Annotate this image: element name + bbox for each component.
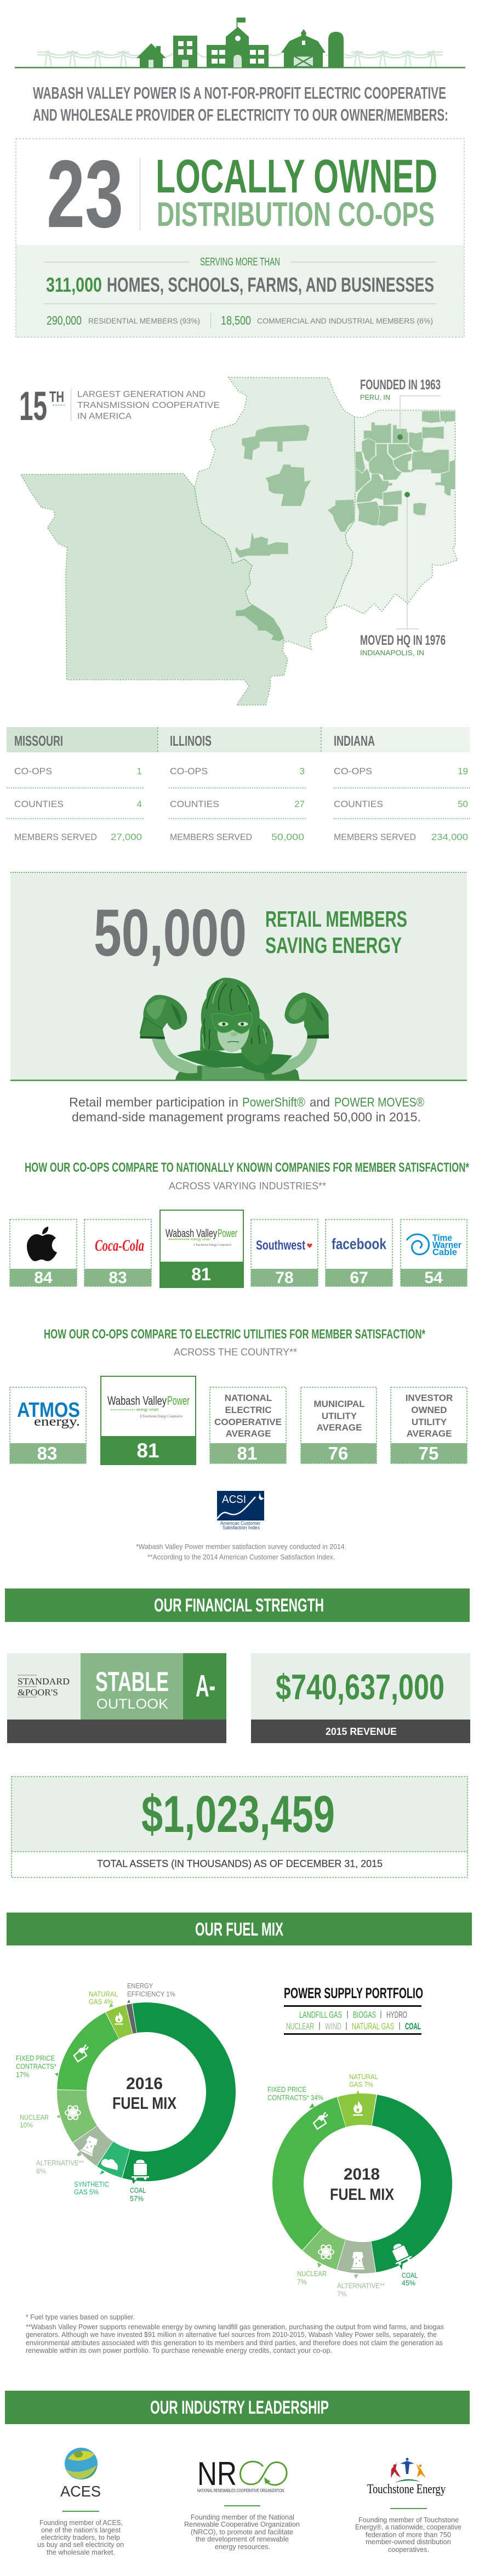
banner: our fuel mix: OUR FUEL MIX: [195, 1919, 283, 1940]
panel base rule: [10, 1080, 467, 1081]
card: Wabash Valley Power 81: energy smart: [136, 1408, 158, 1412]
label: fixed price contracts: FIXED PRICE: [267, 2085, 306, 2093]
Standard & Poor's logo: STANDARD: [18, 1676, 70, 1687]
banner: our industry leadership: OUR INDUSTRY LEADERSHIP: [150, 2397, 329, 2418]
icon: synthetic gas cloud: [101, 2159, 118, 2170]
label: alternative: ALTERNATIVE**: [36, 2159, 84, 2167]
retail members saving energy: [265, 906, 407, 958]
card: Municipal utility average 76: [301, 1387, 377, 1463]
rating A-: A-: [196, 1669, 215, 1704]
callout: 15th largest: 15: [19, 383, 47, 429]
icon: atom: [65, 2104, 81, 2121]
ACSI logo: American Customer: [220, 1520, 260, 1526]
center label: [330, 2165, 394, 2204]
icon: natural gas flame: [115, 2012, 123, 2024]
legend: power supply portfolio: NUCLEAR: [286, 2021, 314, 2032]
NRCO logo: [197, 2455, 287, 2493]
label: synthetic gas: SYNTHETIC: [74, 2180, 109, 2188]
card: National co-op average 81: AVERAGE: [226, 1428, 271, 1439]
programs participation text: Retail member participation in: [69, 1095, 238, 1109]
Touchstone description: member-owned distribution: [366, 2538, 451, 2546]
Standard & Poor's logo: &POOR'S: [18, 1687, 58, 1698]
programs participation text: and: [310, 1095, 330, 1109]
icon: plug: [313, 2112, 328, 2129]
center label: FUEL MIX: [112, 2093, 176, 2113]
panel: S&P rating: [7, 1653, 226, 1743]
power lines: [37, 50, 443, 67]
card: Wabash Valley Power 81: 81: [136, 1439, 159, 1462]
Touchstone description: [355, 2516, 461, 2554]
state column: Indiana: COUNTIES: [334, 799, 383, 809]
stat: commercial: COMMERCIAL AND INDUSTRIAL MEMBERS (6%): [257, 316, 433, 325]
card: Investor owned utility average 75: AVERAGE: [407, 1428, 452, 1439]
card: Atmos Energy 83: 83: [37, 1443, 57, 1463]
serving more than: SERVING MORE THAN: [200, 256, 280, 268]
NRCO description: (NRCO), to promote and facilitate: [191, 2528, 293, 2536]
card: Municipal utility average 76: AVERAGE: [317, 1422, 362, 1433]
state column: Missouri: MEMBERS SERVED: [14, 832, 97, 842]
card: National co-op average 81: [210, 1387, 286, 1463]
card: Municipal utility average 76: MUNICIPAL: [313, 1399, 365, 1409]
ACES description: one of the nation's largest: [41, 2526, 121, 2534]
label: fixed price contracts: CONTRACTS*: [16, 2062, 56, 2070]
big number 50,000: 50,000: [94, 895, 247, 970]
panel: 50,000 retail members: [10, 872, 467, 1081]
card: Southwest 78: Southwest: [256, 1238, 305, 1253]
state column: Missouri: COUNTIES: [14, 799, 64, 809]
legend: power supply portfolio: LANDFILL GAS: [299, 2010, 342, 2020]
legend: power supply portfolio: BIOGAS: [353, 2010, 376, 2020]
card: Coca-Cola 83: 83: [109, 1269, 127, 1287]
state column: Illinois: CO-OPS: [170, 766, 208, 776]
fuel mix footnotes: renewable within its own power portfolio. To purchase renewable energy credits, contact your co-op.: [26, 2346, 332, 2354]
NRCO description: the development of renewable: [196, 2535, 289, 2543]
ACES description: the wholesale market.: [47, 2548, 115, 2556]
callout: moved HQ in 1976: INDIANAPOLIS, IN: [360, 649, 424, 657]
state table: [7, 727, 470, 842]
icon: natural gas flame: [353, 2101, 363, 2115]
label: alternative: ALTERNATIVE**: [337, 2282, 385, 2290]
NRCO logo: NATIONAL RENEWABLES COOPERATIVE ORGANIZATION: [197, 2488, 284, 2493]
icon: alternative plant: [351, 2252, 364, 2269]
stat: residential: [47, 314, 200, 327]
banner: our fuel mix: [7, 1913, 472, 1945]
card: Investor owned utility average 75: [391, 1387, 467, 1463]
Touchstone description: cooperatives.: [388, 2545, 429, 2554]
label: fixed price contracts: 17%: [16, 2070, 29, 2079]
Touchstone Energy logo: Touchstone Energy: [367, 2482, 446, 2496]
card: Time Warner Cable 54: [401, 1219, 467, 1287]
legend: power supply portfolio: [284, 1985, 423, 2035]
state column: Indiana: INDIANA: [334, 733, 375, 749]
fuel mix footnotes: generators. Although we have invested $91 million in alternative fuel sources from 2010-2015, Wabash Valley Power sells, separately, the: [26, 2330, 437, 2339]
card: National co-op average 81: COOPERATIVE: [214, 1417, 282, 1427]
stat: 311,000 homes: 311,000: [46, 274, 102, 296]
card: Facebook 67: 67: [350, 1269, 368, 1287]
state column: Indiana: MEMBERS SERVED: [334, 832, 416, 842]
panel: total assets: $1,023,459: [141, 1785, 335, 1843]
card: Wabash Valley Power 81: A Touchstone Energy Cooperative: [140, 1414, 183, 1418]
center label: [112, 2074, 176, 2113]
card: Wabash Valley Power 81: Power: [167, 1394, 190, 1408]
Touchstone Energy logo: [367, 2458, 446, 2496]
legend: power supply portfolio: NATURAL GAS: [352, 2021, 394, 2032]
label: alternative: [36, 2159, 84, 2175]
ground line: [15, 67, 465, 68]
stable outlook: STABLE: [95, 1666, 169, 1697]
card: Coca-Cola 83: [84, 1219, 151, 1287]
state column: Missouri: 4: [137, 799, 142, 809]
callout: 15th largest: TH: [49, 388, 64, 405]
ACES description: electricity traders, to help: [41, 2533, 120, 2541]
icon: alternative plant: [80, 2135, 100, 2157]
label: coal: [130, 2186, 146, 2203]
card: Facebook 67: facebook: [332, 1235, 386, 1252]
label: natural gas: [89, 1990, 118, 2006]
stable outlook: [95, 1666, 169, 1712]
label: nuclear: [20, 2113, 49, 2129]
label: nuclear: [297, 2269, 327, 2286]
label: coal: 57%: [130, 2194, 144, 2203]
label: alternative: [337, 2282, 385, 2298]
satisfaction footnotes: **According to the 2014 American Customer Satisfaction Index.: [147, 1553, 335, 1561]
card: Investor owned utility average 75: OWNED: [411, 1405, 447, 1415]
NRCO description: [184, 2513, 300, 2551]
center label: 2018: [344, 2165, 380, 2183]
NRCO description: Renewable Cooperative Organization: [184, 2520, 300, 2528]
retail members saving energy: SAVING ENERGY: [265, 933, 402, 958]
ACES description: Founding member of ACES,: [39, 2518, 123, 2527]
card: Facebook 67: [326, 1219, 392, 1287]
ACSI logo: [217, 1491, 264, 1530]
label: fixed price contracts: FIXED PRICE: [16, 2054, 55, 2062]
label: synthetic gas: GAS 5%: [74, 2188, 99, 2196]
label: natural gas: NATURAL: [89, 1990, 118, 1998]
label: coal: COAL: [402, 2271, 418, 2279]
programs participation text: POWER MOVES®: [334, 1095, 424, 1109]
banner: our financial strength: [5, 1588, 470, 1622]
card: Atmos Energy 83: ATMOS: [17, 1399, 80, 1422]
panel: total assets: [12, 1777, 467, 1877]
stat: residential: 290,000: [47, 314, 82, 327]
icon: ACES globe: [65, 2448, 98, 2479]
card: Southwest 78: [251, 1219, 318, 1287]
label: nuclear: NUCLEAR: [20, 2113, 49, 2121]
state column: Missouri: 1: [137, 766, 142, 776]
fuel mix footnotes: environmental attributes associated with this generation to its members and third parties, and therefore does not claim the generation as: [26, 2339, 443, 2347]
label: coal: [402, 2271, 418, 2287]
ACSI logo: Satisfaction Index: [223, 1525, 260, 1530]
card: Investor owned utility average 75: INVESTOR: [406, 1393, 453, 1403]
big number 23: 23: [47, 141, 123, 248]
icon: barn: [281, 29, 326, 67]
state column: Illinois: MEMBERS SERVED: [170, 832, 252, 842]
stable outlook: OUTLOOK: [96, 1696, 168, 1712]
label: fixed price contracts: CONTRACTS* 34%: [267, 2093, 323, 2102]
icon: plug: [74, 2045, 88, 2062]
state column: Indiana: CO-OPS: [334, 766, 372, 776]
Touchstone description: Energy®, a nationwide, cooperative: [355, 2523, 461, 2531]
label: energy efficiency: EFFICIENCY 1%: [127, 1990, 175, 1998]
legend: power supply portfolio: WIND: [325, 2021, 341, 2032]
card: Atmos Energy 83: energy.: [34, 1415, 80, 1429]
panel: total assets: TOTAL ASSETS (IN THOUSANDS) AS OF DECEMBER 31, 2015: [97, 1858, 383, 1869]
stat: commercial: [221, 314, 433, 327]
state column: Illinois: ILLINOIS: [170, 733, 212, 749]
callout: founded in 1963: [360, 377, 441, 440]
card: Wabash Valley Power 81: Wabash Valley: [107, 1394, 167, 1408]
icon: coal cart: [132, 2160, 149, 2180]
legend: power supply portfolio: COAL: [405, 2021, 421, 2032]
map: served counties in Illinois and Missouri: [235, 425, 355, 642]
icon: atom: [318, 2244, 334, 2260]
card: Wabash Valley Power 81: Power: [218, 1228, 237, 1240]
card: Municipal utility average 76: 76: [328, 1443, 348, 1463]
map: Missouri: [21, 474, 288, 705]
card: Time Warner Cable 54: Time: [432, 1233, 452, 1243]
card: Time Warner Cable 54: 54: [424, 1269, 443, 1287]
stat: commercial: 18,500: [221, 314, 251, 327]
card: Wabash Valley Power 81: [100, 1376, 196, 1465]
card: Time Warner Cable 54: Warner: [432, 1240, 461, 1250]
label: fixed price contracts: [16, 2054, 56, 2079]
callout: founded in 1963: FOUNDED IN 1963: [360, 377, 441, 393]
NRCO logo: NR: [197, 2455, 237, 2492]
card: Southwest 78: 78: [275, 1269, 294, 1287]
satisfaction footnotes: [136, 1543, 346, 1561]
state column: Indiana: [321, 727, 470, 842]
center label: 2016: [126, 2074, 163, 2093]
column: ACES: [37, 2448, 124, 2556]
Standard & Poor's logo: [18, 1675, 70, 1698]
label: nuclear: 10%: [20, 2121, 33, 2129]
label pointers: [309, 2090, 403, 2279]
comparison: national companies: [10, 1160, 469, 1287]
card: National co-op average 81: ELECTRIC: [225, 1405, 272, 1415]
NRCO description: energy resources.: [215, 2543, 270, 2551]
icon: coal cart: [389, 2241, 413, 2266]
ACES description: us buy and sell electricity on: [37, 2540, 124, 2549]
map: served counties in Indiana: [355, 411, 455, 526]
label: natural gas: [349, 2073, 378, 2089]
banner: our financial strength: OUR FINANCIAL STRENGTH: [154, 1595, 324, 1616]
card: National co-op average 81: 81: [237, 1443, 257, 1463]
column: Touchstone Energy: [355, 2458, 461, 2554]
label pointers: [55, 2000, 136, 2184]
label: energy efficiency: [127, 1982, 175, 1998]
state column: Indiana: 19: [458, 766, 468, 776]
programs participation text: demand-side management programs reached 50,000 in 2015.: [72, 1110, 421, 1124]
card: Municipal utility average 76: UTILITY: [322, 1411, 357, 1421]
callout: 15th largest: LARGEST GENERATION AND: [77, 390, 206, 399]
state column: Illinois: 27: [294, 799, 305, 809]
column: NRCO: [184, 2455, 300, 2551]
state column: Illinois: 50,000: [271, 832, 304, 842]
label: nuclear: NUCLEAR: [297, 2269, 327, 2278]
card: Time Warner Cable 54: Cable: [432, 1247, 457, 1257]
retail members saving energy: RETAIL MEMBERS: [265, 906, 407, 932]
map: Illinois: [195, 377, 355, 650]
callout: moved HQ in 1976: [360, 492, 446, 657]
column: ACES: ACES: [60, 2483, 101, 2500]
label: alternative: 7%: [337, 2290, 347, 2298]
panel: 2015 revenue: [251, 1653, 470, 1743]
illustration: child superhero with boxing gloves: [140, 978, 329, 1080]
label: coal: COAL: [130, 2186, 146, 2194]
card: Investor owned utility average 75: 75: [419, 1443, 438, 1463]
subheading: ACROSS VARYING INDUSTRIES**: [169, 1181, 326, 1191]
state column: Missouri: CO-OPS: [14, 766, 52, 776]
card: Wabash Valley Power 81: energy smart: [191, 1238, 210, 1241]
legend: power supply portfolio: HYDRO: [386, 2010, 407, 2020]
callout: 15th largest: IN AMERICA: [77, 412, 132, 421]
stat: residential: RESIDENTIAL MEMBERS (93%): [88, 316, 200, 325]
card: Wabash Valley Power 81: A Touchstone Energy Cooperative: [193, 1244, 231, 1247]
fuel mix footnotes: * Fuel type varies based on supplier.: [26, 2313, 135, 2321]
satisfaction footnotes: *Wabash Valley Power member satisfaction survey conducted in 2014.: [136, 1543, 346, 1551]
skyline illustration: [15, 18, 465, 68]
service area map: [19, 377, 457, 705]
icon: school: [207, 18, 269, 67]
donut chart: 2016 fuel mix: [16, 1982, 250, 2203]
programs participation text: [69, 1095, 424, 1124]
label: natural gas: GAS 4%: [89, 1998, 113, 2006]
card: Apple 84: 84: [34, 1269, 53, 1287]
card: Wabash Valley Power 81: [159, 1210, 243, 1287]
state column: Missouri: 27,000: [111, 832, 142, 842]
state column: Illinois: COUNTIES: [170, 799, 219, 809]
fuel mix footnotes: [26, 2313, 444, 2354]
fuel mix footnotes: **Wabash Valley Power supports renewable energy by owning landfill gas generation, purchasing the output from wind farms, and biogas: [26, 2323, 444, 2331]
label: synthetic gas: [74, 2180, 109, 2196]
card: Investor owned utility average 75: UTILITY: [412, 1417, 447, 1427]
map: Indiana: [333, 410, 457, 614]
card: Coca-Cola 83: Coca-Cola: [95, 1236, 144, 1255]
state column: Missouri: [7, 727, 158, 842]
card: Wabash Valley Power 81: Wabash Valley: [166, 1228, 217, 1240]
card: National co-op average 81: NATIONAL: [225, 1393, 272, 1403]
card: Apple 84: [10, 1219, 77, 1287]
callout: 15th largest: TRANSMISSION COOPERATIVE: [77, 401, 220, 410]
label: coal: 45%: [402, 2279, 415, 2287]
callout: 15th largest: [19, 383, 220, 429]
ACSI logo: ACSI: [222, 1494, 246, 1506]
panel: 2015 revenue: 2015 REVENUE: [326, 1726, 397, 1737]
label: nuclear: 7%: [297, 2278, 307, 2286]
Touchstone description: Founding member of Touchstone: [358, 2516, 459, 2524]
NRCO description: Founding member of the National: [191, 2513, 294, 2521]
intro statement: [33, 84, 448, 124]
banner: our industry leadership: [5, 2391, 470, 2424]
callout: founded in 1963: PERU, IN: [360, 393, 390, 401]
ACES description: [37, 2518, 124, 2556]
label: natural gas: NATURAL: [349, 2073, 378, 2081]
subheading: ACROSS THE COUNTRY**: [174, 1347, 297, 1358]
card: Atmos Energy 83: [10, 1387, 86, 1463]
label: alternative: 6%: [36, 2167, 46, 2175]
icon: office building: [173, 36, 197, 67]
label: energy efficiency: ENERGY: [127, 1982, 153, 1990]
state column: Indiana: 234,000: [431, 832, 468, 842]
state column: Illinois: [158, 727, 321, 842]
state column: Indiana: 50: [458, 799, 468, 809]
programs participation text: PowerShift®: [242, 1095, 305, 1109]
state column: Missouri: MISSOURI: [14, 733, 63, 749]
icon: silo: [328, 32, 344, 67]
Touchstone description: federation of more than 750: [366, 2530, 451, 2539]
panel: 23 distribution co-ops: [16, 139, 464, 337]
state column: Illinois: 3: [300, 766, 305, 776]
comparison: electric utilities: [10, 1327, 467, 1465]
label: fixed price contracts: [267, 2085, 323, 2102]
center label: FUEL MIX: [330, 2186, 394, 2204]
label: natural gas: GAS 7%: [349, 2080, 373, 2089]
icon: house: [136, 43, 166, 67]
donut chart: 2018 fuel mix: [258, 2073, 467, 2298]
card: Wabash Valley Power 81: 81: [191, 1264, 211, 1284]
